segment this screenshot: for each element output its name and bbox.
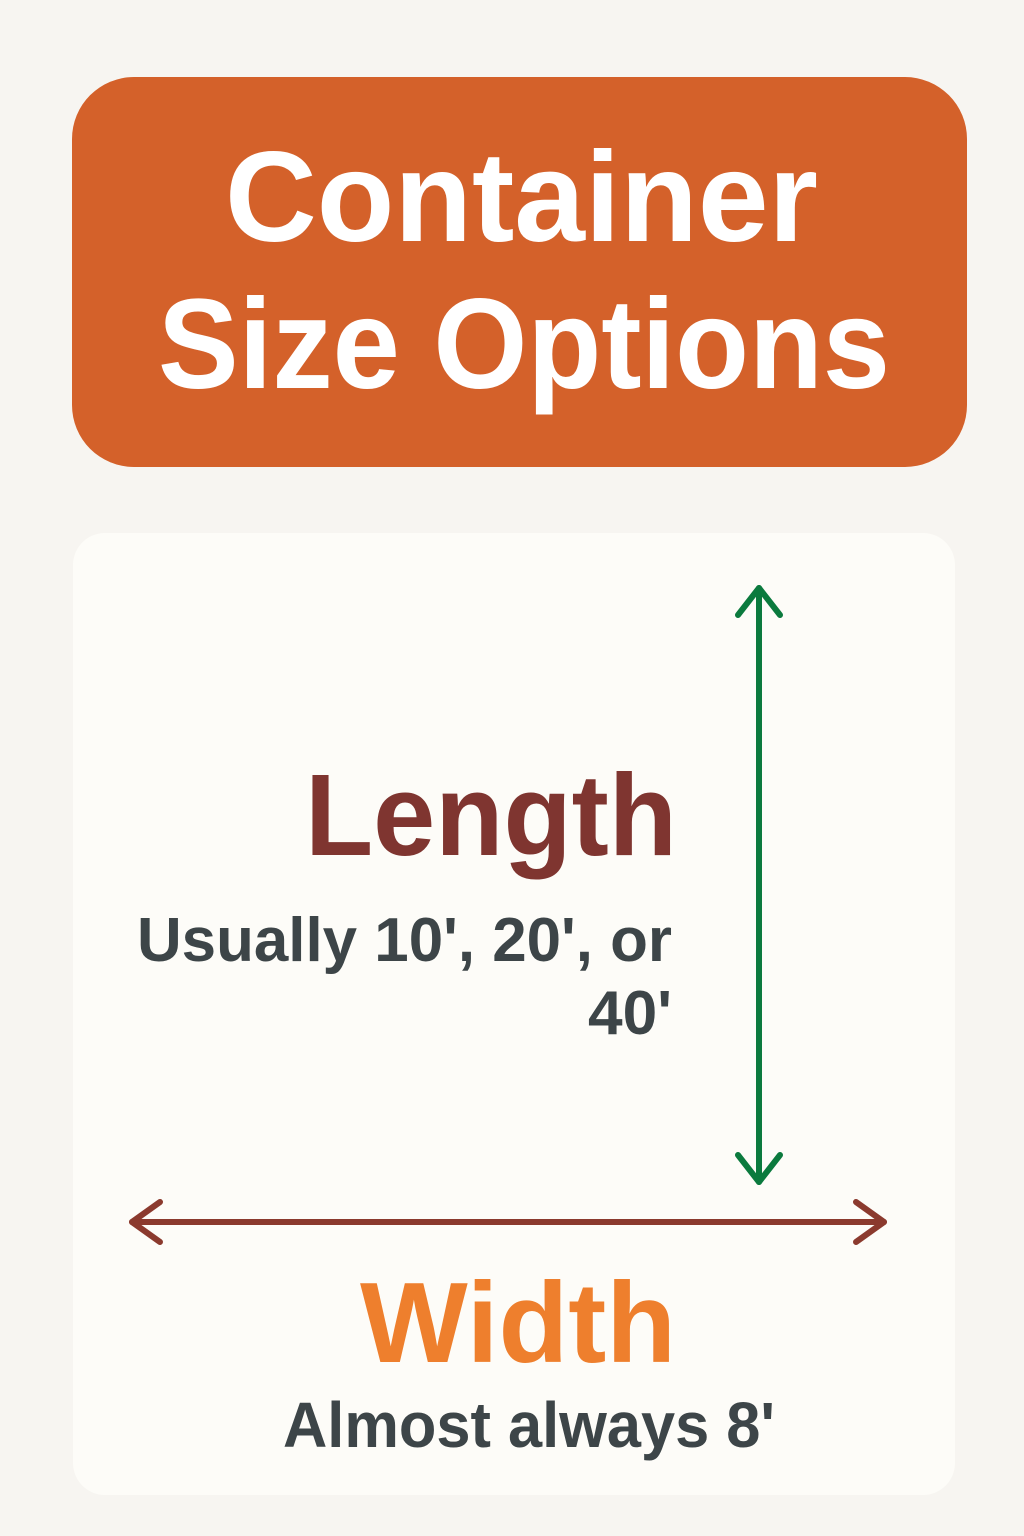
panel: dimensions bbox=[73, 533, 955, 1495]
text: length description bbox=[137, 906, 672, 1048]
arrow: horizontal width (red) bbox=[132, 1202, 884, 1242]
title text: Container bbox=[225, 126, 818, 269]
title text bbox=[158, 126, 890, 416]
text: length description: Usually 10', 20', or bbox=[137, 906, 672, 975]
heading: Length: Length bbox=[305, 750, 677, 880]
text: width description: Almost always 8' bbox=[283, 1389, 775, 1461]
title banner bbox=[72, 77, 967, 467]
title text: Size Options bbox=[158, 273, 890, 416]
text: length description: 40' bbox=[588, 979, 672, 1048]
arrow: vertical length (green) bbox=[738, 588, 780, 1182]
heading: Width: Width bbox=[360, 1260, 676, 1387]
